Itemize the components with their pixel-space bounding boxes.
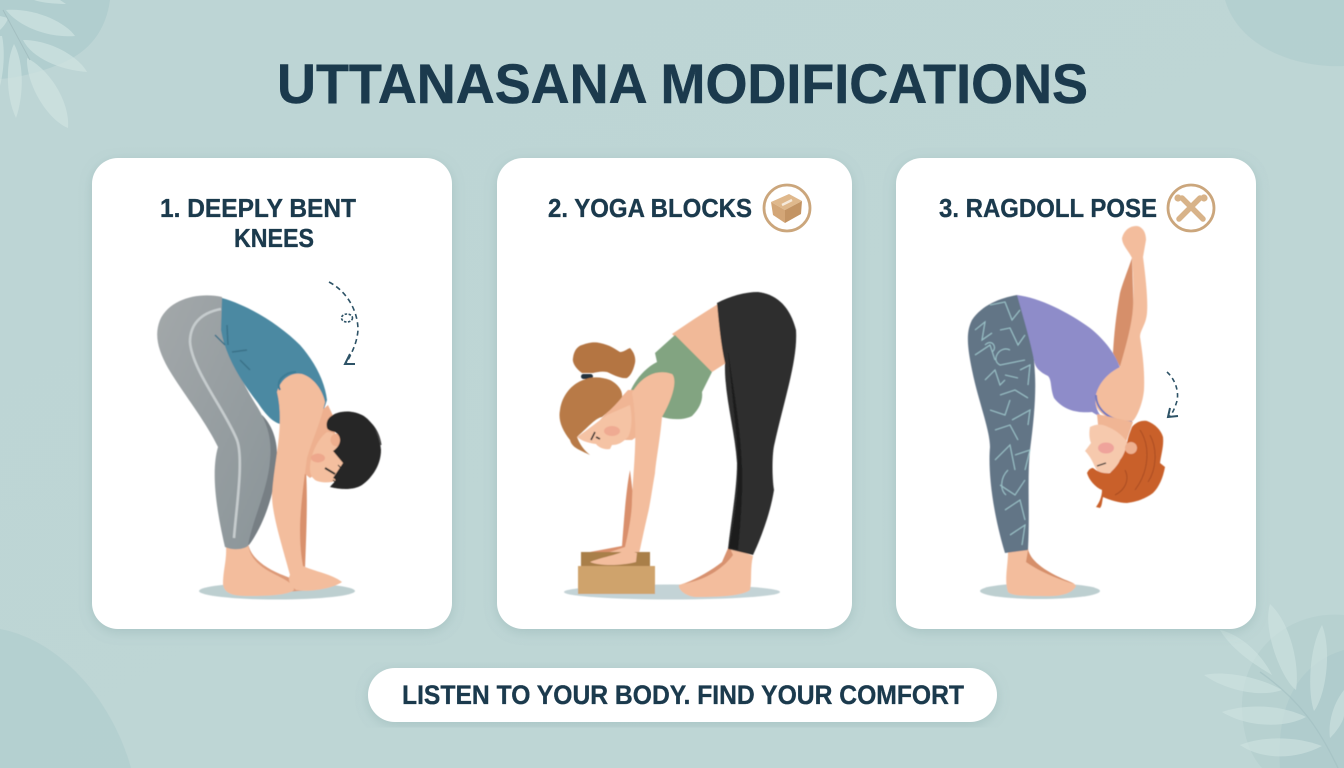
leggings [968,295,1035,553]
panel: deeply bent knees [92,158,452,629]
dashed arrow [1167,372,1178,417]
near arm [272,374,342,591]
neck and face [1097,414,1133,445]
icon: crossed sticks [1168,185,1214,231]
near hand [590,549,637,565]
block [578,552,655,594]
icon: box [764,185,810,231]
near arm [1095,226,1147,422]
figure: bent knee forward fold [157,295,381,600]
dashed arrow [329,282,358,364]
front leg [157,295,270,549]
callout pill [368,668,997,722]
hair [327,411,381,489]
card heading 1: KNEES [234,223,314,253]
card heading 1 [160,193,356,253]
decorative leaves: top left [0,0,87,128]
back leg [240,415,277,545]
torso [221,298,327,425]
green top [630,335,712,419]
card heading 2: 2. YOGA BLOCKS [548,193,752,223]
near arm [589,372,674,565]
card heading 1: 1. DEEPLY BENT [160,193,356,223]
figure: ragdoll forward fold [968,226,1165,599]
foot [679,546,753,597]
far arm [290,470,330,582]
panel: ragdoll pose [896,158,1256,629]
card heading 3: 3. RAGDOLL POSE [939,193,1157,223]
hair [1087,421,1165,508]
purple top [1017,295,1120,420]
back [672,304,726,372]
figure: forward fold on blocks [559,292,796,600]
far arm [1113,258,1134,367]
leggings [717,292,796,555]
legging pattern [975,302,1030,545]
back foot [248,543,310,592]
panel: yoga blocks [497,158,852,629]
callout pill: LISTEN TO YOUR BODY. FIND YOUR COMFORT [402,680,964,710]
hair [573,342,635,378]
neck and face [600,390,654,440]
foot [1006,548,1076,596]
far arm [582,470,636,560]
title: UTTANASANA MODIFICATIONS [277,52,1088,115]
neck [300,405,335,478]
face [310,432,345,482]
decorative leaves: bottom right [1204,604,1344,768]
